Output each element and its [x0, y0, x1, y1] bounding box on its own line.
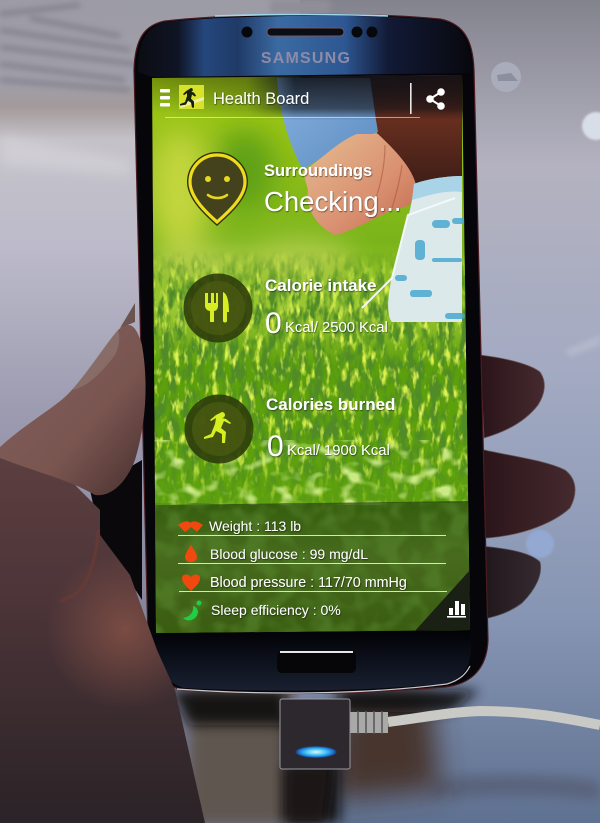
- surroundings text: Surroundings: [264, 162, 372, 180]
- phone chin: [156, 631, 471, 691]
- icon: weight: [178, 521, 203, 532]
- phone top bezel: [138, 16, 471, 77]
- surroundings text: Checking...: [264, 186, 402, 217]
- calorie intake text: Calorie intake: [265, 276, 376, 295]
- screen: [148, 74, 472, 634]
- brand logo: SAMSUNG: [261, 50, 351, 67]
- calorie intake text: Kcal/ 2500 Kcal: [285, 320, 388, 336]
- weight row: Weight : 113 lb: [209, 518, 301, 534]
- app title: Health Board: [213, 90, 309, 108]
- surroundings text: [264, 162, 402, 217]
- photo: grass texture: [150, 250, 472, 510]
- hand: thumb over the phone edge: [0, 303, 146, 495]
- calories burned text: Kcal/ 1900 Kcal: [287, 443, 390, 459]
- home button: [277, 651, 356, 673]
- icon: surroundings pin with smiley: [190, 155, 245, 222]
- glucose row: Blood glucose : 99 mg/dL: [210, 546, 368, 562]
- menu icon: [160, 89, 170, 106]
- calories burned text: Calories burned: [266, 395, 395, 414]
- icon: calories burned runner: [184, 394, 254, 464]
- icon: calorie intake fork and knife: [184, 274, 252, 342]
- bar divider: [410, 83, 412, 114]
- top bar dark overlay: [182, 75, 462, 119]
- icon: moon and star: [183, 600, 202, 620]
- photo: leg: [300, 74, 462, 190]
- top bar: [160, 83, 444, 118]
- calories burned text: [266, 395, 395, 463]
- bottom translucent panel: [150, 501, 472, 634]
- hand: fingers behind phone: [480, 355, 575, 619]
- phone body: [134, 14, 488, 693]
- icon: glucose drop: [185, 545, 197, 562]
- pressure row: Blood pressure : 117/70 mmHg: [210, 575, 407, 591]
- app icon: runner: [179, 85, 204, 109]
- photo: hand: [303, 134, 417, 235]
- calories burned text: 0: [267, 430, 284, 463]
- charging cable: [280, 699, 600, 769]
- sleep row: Sleep efficiency : 0%: [211, 602, 341, 618]
- icon: heart: [182, 574, 200, 591]
- photo: blurred green background: [148, 130, 355, 282]
- phone earpiece and sensors: [242, 26, 378, 38]
- calorie intake text: 0: [265, 307, 282, 340]
- hand: palm: [0, 455, 205, 823]
- photo: broad leaves: [150, 440, 472, 505]
- shadow and hand below the phone: [170, 690, 480, 823]
- blue LED: [295, 746, 337, 758]
- bottom stats list: [178, 518, 466, 620]
- calorie intake text: [265, 276, 388, 340]
- share icon: [427, 89, 444, 109]
- photo: shoe: [388, 176, 462, 322]
- icon: bar chart: [447, 601, 466, 618]
- shadow between thumb and palm: [90, 460, 142, 600]
- corner graph tab: [414, 570, 470, 632]
- USB connector: [280, 699, 350, 769]
